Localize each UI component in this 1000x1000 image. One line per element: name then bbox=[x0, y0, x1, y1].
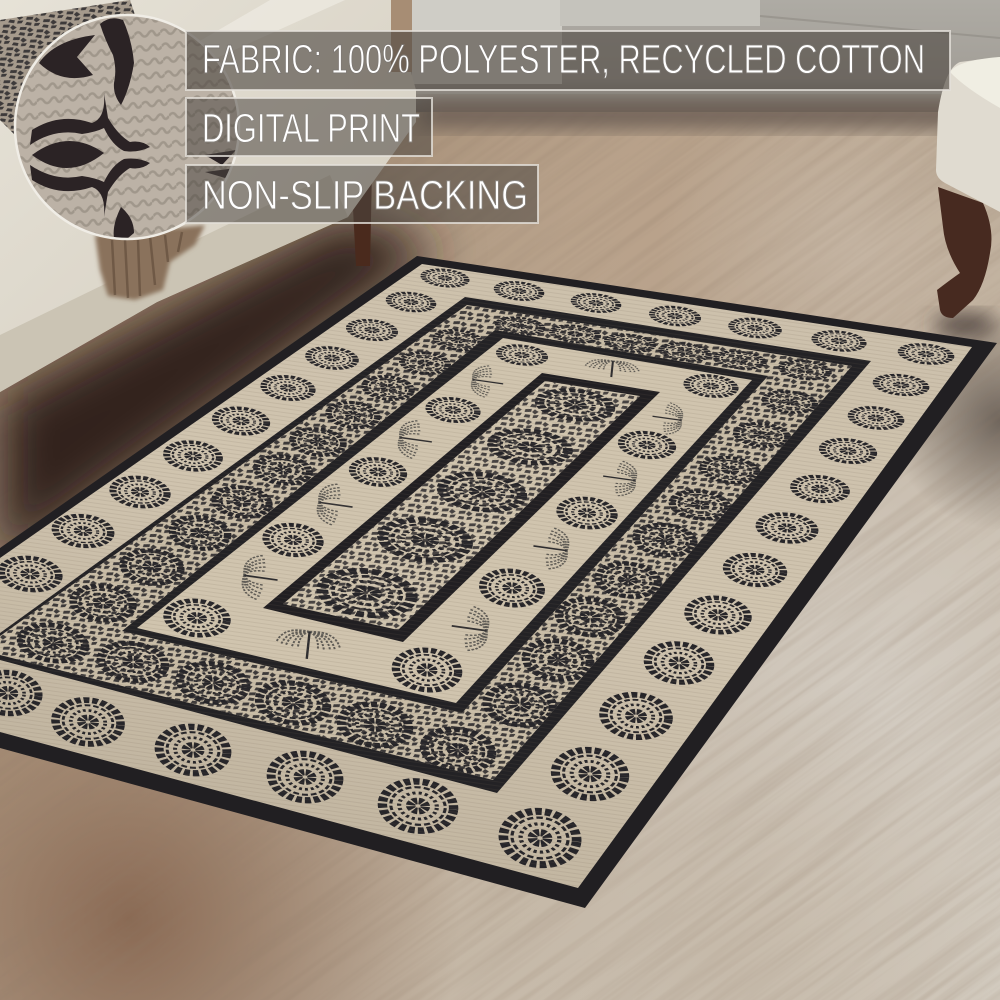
label: digital print bbox=[186, 98, 432, 156]
label: digital print: DIGITAL PRINT bbox=[202, 105, 420, 151]
outer row of medallions bbox=[0, 268, 952, 868]
patterned band rosettes bbox=[19, 316, 830, 775]
throw blanket fringe bbox=[95, 225, 205, 300]
patterned band background bbox=[0, 305, 852, 780]
label: non-slip backing: NON-SLIP BACKING bbox=[202, 172, 528, 218]
wall and baseboard bbox=[400, 0, 1000, 128]
shadow under sofa bbox=[0, 215, 440, 570]
inner frame bbox=[122, 330, 768, 713]
throw blanket patterned top bbox=[0, 0, 150, 170]
willow tree motifs bbox=[240, 358, 684, 662]
rug outer black border bbox=[0, 256, 997, 908]
outer band frame bbox=[0, 297, 871, 793]
fabric motif shapes bbox=[30, 18, 236, 238]
rug beige field bbox=[0, 264, 972, 888]
zoom circle: fabric detail bbox=[15, 15, 239, 239]
patterned band filler bbox=[0, 305, 852, 780]
central panel rosettes bbox=[320, 387, 612, 619]
circle outline bbox=[15, 15, 239, 239]
rug weave texture bbox=[0, 264, 972, 888]
sofa leg bbox=[351, 170, 372, 266]
label: non-slip backing bbox=[186, 165, 538, 223]
chair upholstery bbox=[936, 57, 1000, 212]
central panel frame bbox=[263, 373, 660, 642]
rug bbox=[0, 256, 997, 908]
sofa bbox=[0, 0, 416, 392]
inner beige field bbox=[137, 338, 752, 703]
chair leg bbox=[937, 187, 991, 318]
chair shadow bbox=[933, 313, 997, 337]
inner row of medallions bbox=[165, 343, 736, 693]
central panel background bbox=[283, 381, 640, 630]
central panel filler bbox=[283, 381, 640, 630]
